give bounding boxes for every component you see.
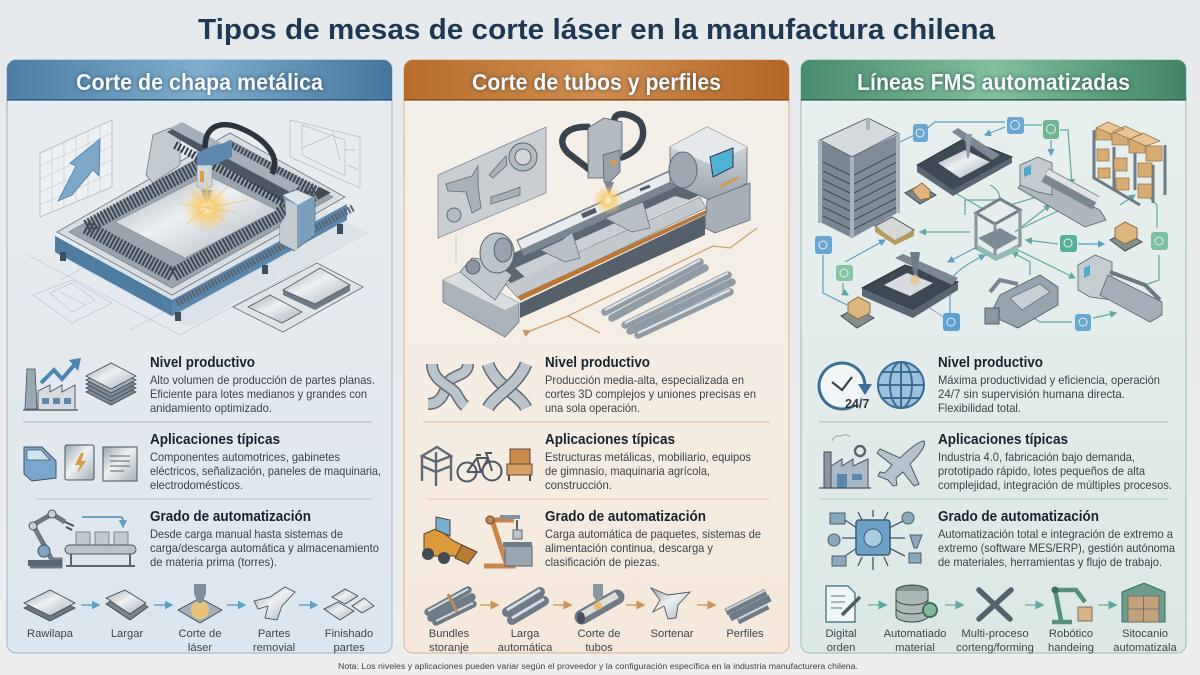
step: sorting: Sortenar: [651, 628, 694, 640]
section: nivel productivo: Nivel productivo: [150, 355, 255, 371]
panel header: FMS: Líneas FMS automatizadas: [857, 69, 1130, 95]
section: grado de automatización: [828, 509, 1176, 570]
section: nivel productivo: Producción media-alta, especializada en: [545, 374, 744, 387]
icon: metal panel: [103, 447, 137, 481]
section: aplicaciones típicas: [422, 432, 751, 492]
section: grado de automatización: clasificación de piezas.: [545, 556, 660, 569]
section: aplicaciones típicas: complejidad, integración de múltiples procesos.: [938, 479, 1172, 492]
spark: [593, 185, 623, 215]
panel: líneas FMS automatizadas: [801, 60, 1186, 654]
step: laser cutting: láser: [188, 642, 212, 654]
section: nivel productivo: Alto volumen de producción de partes planas.: [150, 374, 375, 387]
process flow: FMS: [825, 583, 1177, 654]
section: nivel productivo: una sola operación.: [545, 402, 640, 415]
illustration: flat-bed laser cutting table: [28, 120, 368, 335]
tube: [520, 169, 687, 248]
step: loading: Largar: [111, 628, 143, 640]
step: robotic handling: handeing: [1048, 642, 1094, 654]
laser table 2: [862, 252, 958, 318]
process flow: tubos: [428, 584, 770, 654]
section: grado de automatización: Automatización total e integración de extremo a: [938, 528, 1174, 541]
AGV shuttles: [841, 183, 1142, 328]
icon: robot loading cell: [484, 516, 532, 566]
step: finished parts: [324, 589, 374, 654]
panel header: tubos: Corte de tubos y perfiles: [472, 69, 721, 95]
icon: 24/7 clock: [819, 363, 872, 411]
step: finished parts: Finishado: [325, 628, 373, 640]
step: robotic handling: Robótico: [1049, 628, 1093, 640]
step: tube cutting: Corte de: [578, 628, 620, 640]
section: grado de automatización: Grado de automatización: [938, 509, 1099, 525]
spare sheets: [233, 263, 363, 332]
step: profiles: [726, 590, 770, 640]
process flow: chapa: [24, 584, 374, 654]
frame top: [57, 133, 345, 295]
section: aplicaciones típicas: Aplicaciones típicas: [545, 432, 675, 448]
step: digital order: orden: [827, 642, 855, 654]
central transfer frame: [976, 199, 1020, 261]
icon: stacked metal sheets: [86, 363, 136, 405]
step: part removal: Partes: [258, 628, 291, 640]
chart grid with rising arrow: [40, 120, 112, 217]
step: automatic loading: Larga: [511, 628, 540, 640]
step: laser cutting: Corte de: [179, 628, 221, 640]
icon: factory with growth arrow: [23, 358, 81, 410]
step: finished parts: partes: [333, 642, 365, 654]
step: robotic handling: [1048, 586, 1094, 654]
step: digital order: [825, 586, 860, 654]
tube bundles: [605, 260, 732, 335]
step: bundles: storanje: [429, 642, 469, 654]
section: grado de automatización: de materiales, herramientas y flujo de trabajo.: [938, 556, 1162, 569]
panel: corte de tubos y perfiles: [404, 60, 789, 654]
section: aplicaciones típicas: Aplicaciones típicas: [938, 432, 1068, 448]
step: bundles: [428, 589, 473, 654]
icon: airplane: [877, 441, 925, 486]
step: automatic loading: [498, 590, 553, 654]
section: grado de automatización: Grado de automatización: [150, 509, 311, 525]
section: nivel productivo: [428, 355, 756, 415]
step: automated material: material: [895, 642, 935, 654]
laser head: [197, 141, 232, 204]
icon: smart factory: [819, 435, 871, 488]
icon: robot arm and conveyor: [28, 510, 136, 567]
icon: electric cabinet: [65, 445, 94, 480]
step: automated warehouse: [1113, 583, 1177, 654]
section: nivel productivo: cortes 3D complejos y uniones precisas en: [545, 388, 756, 401]
cable chain: [562, 114, 643, 170]
section: grado de automatización: [28, 509, 379, 569]
panel header: chapa: [7, 60, 392, 101]
step: automated warehouse: automatizala: [1113, 642, 1177, 654]
icon: bicycle: [458, 453, 502, 482]
robot cell: [985, 275, 1058, 328]
base and feet: [55, 204, 347, 321]
laser table 1: [917, 128, 1012, 196]
section: nivel productivo: 24/7 sin supervisión humana directa.: [938, 388, 1125, 401]
section: nivel productivo: Máxima productividad y eficiencia, operación: [938, 374, 1160, 387]
section: nivel productivo: Nivel productivo: [545, 355, 650, 371]
panel header: tubos: [404, 60, 789, 101]
icon: metal structure: [422, 447, 451, 486]
section: aplicaciones típicas: de gimnasio, maquinaria agrícola,: [545, 465, 710, 478]
section: grado de automatización: Carga automática de paquetes, sistemas de: [545, 528, 761, 541]
section: aplicaciones típicas: eléctricos, señalización, paneles de maquinaria,: [150, 465, 381, 478]
tube machine: [1018, 157, 1106, 227]
section: aplicaciones típicas: Aplicaciones típicas: [150, 432, 280, 448]
laser spark: [178, 180, 248, 232]
step: multi-process: [956, 590, 1034, 654]
right housing: [669, 127, 750, 233]
step: tube cutting: tubos: [585, 642, 613, 654]
icon: pipe cross fittings: [428, 364, 526, 408]
step: automated material: [884, 585, 946, 654]
step: automated material: Automatiado: [884, 628, 946, 640]
cable chain: [205, 125, 275, 174]
section: grado de automatización: [422, 509, 761, 569]
blueprint sketch: [290, 120, 360, 188]
step: sorting: [651, 588, 694, 640]
panel header: chapa: Corte de chapa metálica: [76, 69, 323, 95]
icon: AI chip network: [828, 510, 922, 570]
section: nivel productivo: [819, 355, 1160, 415]
step: loading: [106, 590, 148, 640]
section: aplicaciones típicas: Industria 4.0, fabricación bajo demanda,: [938, 451, 1135, 464]
step: tube cutting: [577, 584, 620, 654]
base: [443, 183, 706, 337]
line machine: [1078, 255, 1162, 322]
dimension arrow: [530, 228, 757, 333]
step: raw sheet: Rawilapa: [27, 628, 74, 640]
section: grado de automatización: de materia prima (torres).: [150, 556, 277, 569]
section: aplicaciones típicas: Estructuras metálicas, mobiliario, equipos: [545, 451, 751, 464]
footnote: Nota: Los niveles y aplicaciones pueden variar según el proveedor y la configuración específica en la industria manufacturera chilena.: [338, 661, 858, 671]
step: bundles: Bundles: [429, 628, 470, 640]
section: grado de automatización: Desde carga manual hasta sistemas de: [150, 528, 343, 541]
section: aplicaciones típicas: [819, 432, 1172, 492]
panel: corte de chapa metálica: [7, 60, 392, 654]
section: aplicaciones típicas: construcción.: [545, 479, 612, 492]
connector arrows: [823, 122, 1159, 322]
small network badges: [815, 117, 1168, 331]
step: profiles: Perfiles: [726, 628, 764, 640]
warehouse rack: [1094, 122, 1165, 205]
section: grado de automatización: extremo (software MES/ERP), gestión autónoma: [938, 542, 1176, 555]
icon: chair: [507, 449, 532, 481]
rack tower: [820, 118, 898, 238]
section: aplicaciones típicas: Componentes automotrices, gabinetes: [150, 451, 340, 464]
step: automatic loading: automática: [498, 642, 553, 654]
metal sheet: [115, 175, 277, 258]
step: part removal: removial: [253, 642, 295, 654]
illustration: tube laser machine: [438, 114, 757, 337]
title: Tipos de mesas de corte láser en la manufactura chilena: [198, 14, 996, 46]
section: aplicaciones típicas: prototipado rápido, lotes pequeños de alta: [938, 465, 1146, 478]
left chuck: [460, 233, 514, 300]
panel header: FMS: [801, 60, 1186, 101]
laser head: [588, 118, 622, 195]
step: laser cutting: [178, 584, 222, 654]
icon: 24/7 clock: 24/7: [845, 397, 869, 411]
section: aplicaciones típicas: [24, 432, 381, 492]
section: nivel productivo: anidamiento optimizado.: [150, 402, 272, 415]
section: nivel productivo: Eficiente para lotes medianos y grandes con: [150, 388, 367, 401]
section: grado de automatización: carga/descarga automática y almacenamiento: [150, 542, 379, 555]
icon: loader: [422, 517, 477, 564]
section: nivel productivo: [23, 355, 375, 415]
step: digital order: Digital: [825, 628, 857, 640]
section: nivel productivo: Flexibilidad total.: [938, 402, 1021, 415]
icon: car door: [24, 447, 56, 481]
icon: globe: [878, 362, 924, 408]
section: grado de automatización: Grado de automatización: [545, 509, 706, 525]
gantry beam: [146, 122, 315, 251]
step: multi-process: corteng/forming: [956, 642, 1034, 654]
section: nivel productivo: Nivel productivo: [938, 355, 1043, 371]
supports: [540, 202, 650, 262]
step: part removal: [253, 587, 295, 654]
step: automated warehouse: Sitocanio: [1122, 628, 1168, 640]
step: raw sheet: [24, 590, 75, 640]
section: grado de automatización: alimentación continua, descarga y: [545, 542, 713, 555]
cut parts plate: [438, 127, 546, 238]
illustration: FMS network: [815, 117, 1168, 331]
step: multi-process: Multi-proceso: [961, 628, 1029, 640]
section: aplicaciones típicas: electrodomésticos.: [150, 479, 243, 492]
